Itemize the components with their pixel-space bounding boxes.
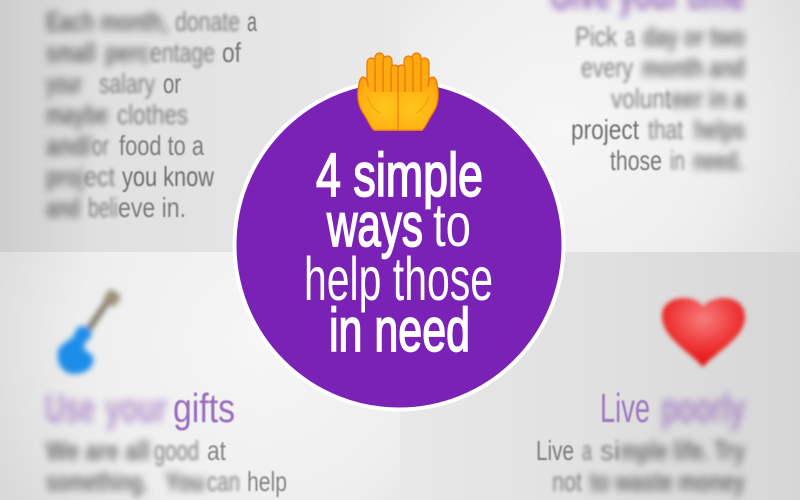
icon: guitar	[58, 288, 122, 374]
donate body text: a	[247, 6, 257, 37]
donate body text: and/	[46, 130, 92, 161]
give your time body text	[571, 21, 745, 176]
heading: use your gifts: your	[105, 385, 167, 431]
live poorly body text: si	[600, 435, 620, 466]
icon: open palms	[358, 53, 438, 130]
donate body text: and	[46, 192, 80, 223]
donate body text: your	[46, 68, 82, 99]
donate body text: donate	[175, 6, 240, 37]
donate body text: food to a	[119, 130, 204, 161]
donate body text: salary	[99, 68, 155, 99]
live poorly body text: mple life. Try	[620, 435, 745, 466]
live poorly body text: to waste money	[590, 466, 745, 497]
donate body text: clothes	[117, 99, 188, 130]
use your gifts body text: We are all	[46, 435, 150, 466]
right hand	[398, 53, 438, 130]
give your time body text: those	[610, 145, 662, 176]
title: help those	[304, 245, 493, 313]
live poorly body text: a	[582, 435, 592, 466]
donate body text: beli	[88, 192, 118, 223]
title: ways	[326, 191, 423, 259]
live poorly body text: not	[552, 466, 582, 497]
give your time body text: that	[648, 114, 683, 145]
give your time body text: volunt	[611, 83, 671, 114]
use your gifts body text: help	[247, 466, 287, 497]
use your gifts body text: can	[207, 466, 240, 497]
donate body text: proj	[46, 161, 84, 192]
title: to	[433, 191, 471, 259]
give your time body text: every	[581, 52, 633, 83]
heading: use your gifts: gifts	[173, 385, 235, 431]
give your time body text: in	[670, 145, 685, 176]
donate body text: you know	[122, 161, 215, 192]
panel: give your time	[550, 0, 745, 176]
give your time body text: eer in a	[671, 83, 745, 114]
donate body text: Each month,	[46, 6, 168, 37]
donate body text: of	[222, 37, 241, 68]
give your time body text: need.	[693, 145, 743, 176]
donate body text: maybe	[46, 99, 108, 130]
donate body text	[46, 6, 257, 223]
donate body text: entage	[150, 37, 215, 68]
donate body text: small	[46, 37, 96, 68]
use your gifts body text: something.	[46, 466, 148, 497]
give your time body text: project	[571, 114, 639, 145]
give your time body text: month and	[642, 52, 745, 83]
heading: live poorly: Live	[600, 385, 650, 431]
donate body text: eve in.	[118, 192, 186, 223]
panel: donate	[46, 6, 257, 223]
panel: live poorly	[536, 298, 745, 497]
title: in need	[329, 296, 470, 364]
donate body text: or	[92, 130, 109, 161]
live poorly body text	[536, 435, 745, 497]
heading: use your gifts	[45, 385, 235, 431]
live poorly body text: Live	[536, 435, 574, 466]
heading: use your gifts: Use	[45, 385, 95, 431]
heading: live poorly: poorly	[661, 385, 745, 431]
use your gifts body text: at	[207, 435, 226, 466]
give your time body text: helps	[694, 114, 745, 145]
icon: heart	[662, 298, 745, 367]
use your gifts body text	[46, 435, 287, 497]
title: 4 simple	[316, 141, 483, 209]
give your time body text: Pick	[575, 21, 618, 52]
give your time body text: a	[625, 21, 635, 52]
give your time body text: day or two	[643, 21, 745, 52]
donate body text: or	[163, 68, 181, 99]
donate body text: perc	[105, 37, 150, 68]
central purple circle	[234, 80, 564, 410]
donate body text: ect	[84, 161, 115, 192]
use your gifts body text: good	[154, 435, 199, 466]
panel: use your gifts	[45, 288, 287, 497]
left hand	[358, 53, 398, 130]
title	[304, 141, 493, 364]
heading: live poorly	[600, 385, 745, 431]
use your gifts body text: You	[165, 466, 205, 497]
